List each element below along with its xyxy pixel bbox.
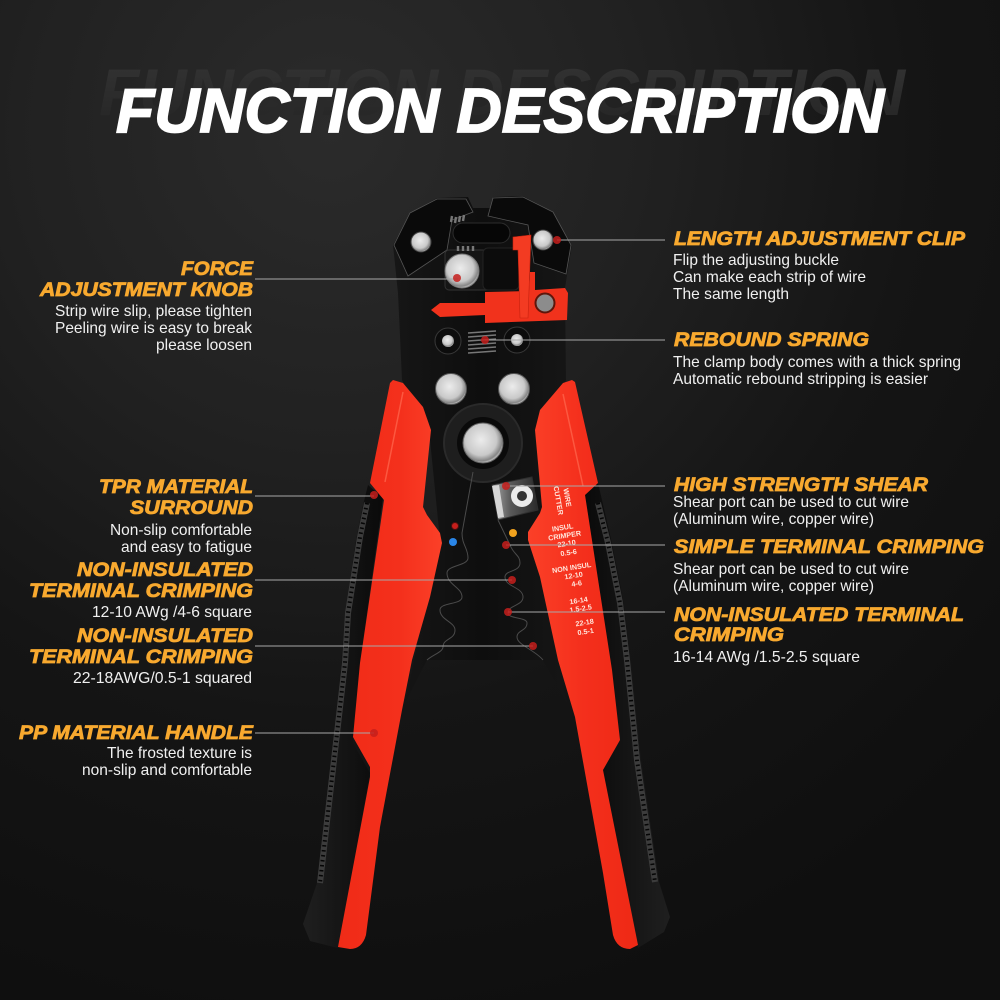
handle printed labels: WIRE [561, 488, 574, 508]
heading: LENGTH ADJUSTMENT CLIP [674, 228, 966, 250]
inner dark block [483, 248, 519, 290]
description [673, 494, 909, 528]
right handle highlight [563, 394, 583, 486]
callout: non-insulated terminal crimping 22-18 [29, 625, 253, 687]
handle printed labels [548, 485, 594, 637]
handle printed labels: 1.5-2.5 [569, 602, 592, 615]
heading: TPR MATERIAL [99, 476, 253, 498]
title shadow text: FUNCTION DESCRIPTION [99, 55, 906, 129]
handle printed labels: 0.5-1 [577, 626, 594, 637]
heading [99, 476, 253, 519]
description: The same length [673, 286, 789, 303]
description: Flip the adjusting buckle [673, 252, 839, 269]
handle printed labels: NON INSUL [551, 560, 592, 575]
heading: HIGH STRENGTH SHEAR [674, 474, 928, 496]
heading: TERMINAL CRIMPING [29, 646, 253, 668]
heading: NON-INSULATED [77, 559, 253, 581]
description: non-slip and comfortable [82, 762, 252, 779]
description: 16-14 AWg /1.5-2.5 square [673, 649, 860, 666]
callout: simple terminal crimping [673, 536, 984, 595]
description: 22-18AWG/0.5-1 squared [73, 670, 252, 687]
handle printed labels: 4-6 [571, 578, 582, 589]
illustration: wire stripper pliers [303, 196, 670, 949]
callout: rebound spring [673, 329, 961, 388]
heading [39, 258, 254, 301]
right red handle [528, 380, 638, 949]
handle printed labels: CUTTER [551, 485, 566, 516]
description [673, 252, 866, 303]
heading: SIMPLE TERMINAL CRIMPING [674, 536, 984, 558]
heading: NON-INSULATED [77, 625, 253, 647]
head slot [453, 223, 510, 243]
pivot ring [444, 404, 522, 482]
callout: length adjustment clip [673, 228, 966, 303]
description [55, 303, 253, 354]
left handle highlight [385, 392, 403, 482]
shear blade [492, 477, 538, 520]
plier central body [393, 196, 572, 703]
jaw profile right [498, 520, 543, 660]
callout: non-insulated terminal crimping 16-14 [673, 604, 964, 666]
heading: FORCE [181, 258, 254, 280]
heading: ADJUSTMENT KNOB [39, 279, 253, 301]
indicator dots [449, 522, 517, 546]
jaw top plates [394, 197, 571, 276]
handle printed labels: 16-14 [569, 595, 588, 606]
description: The frosted texture is [107, 745, 252, 762]
callout: force adjustment knob [39, 258, 254, 354]
heading [29, 559, 253, 602]
description: Can make each strip of wire [673, 269, 866, 286]
spring recess [435, 327, 530, 354]
knob teeth [451, 215, 473, 251]
description [110, 522, 252, 556]
pivot recess [457, 417, 509, 469]
heading [674, 604, 964, 646]
rivet: top left [411, 232, 431, 252]
rebound spring [468, 331, 496, 353]
callout: non-insulated terminal crimping 12-10 [29, 559, 253, 621]
description: Peeling wire is easy to break [55, 320, 253, 337]
title [99, 55, 906, 146]
callout: high strength shear [673, 474, 928, 528]
heading: PP MATERIAL HANDLE [19, 722, 254, 744]
heading: SURROUND [130, 497, 253, 519]
description: Shear port can be used to cut wire [673, 494, 909, 511]
adjustment knob [445, 254, 479, 288]
handle printed labels: 22-18 [575, 617, 594, 628]
description [673, 354, 961, 388]
description [82, 745, 252, 779]
title main text: FUNCTION DESCRIPTION [116, 77, 885, 146]
description: 12-10 AWg /4-6 square [92, 604, 252, 621]
description: please loosen [156, 337, 252, 354]
rivet: top right [533, 230, 553, 250]
heading: CRIMPING [674, 624, 784, 646]
heading [29, 625, 253, 668]
handle printed labels: 12-10 [564, 570, 583, 581]
callout: pp material handle [19, 722, 254, 779]
description: (Aluminum wire, copper wire) [673, 511, 874, 528]
small rivets [442, 334, 523, 347]
description [673, 561, 909, 595]
description: and easy to fatigue [121, 539, 252, 556]
right grip [585, 483, 670, 948]
callout markers [370, 236, 561, 737]
handle printed labels: 0.5-6 [560, 547, 577, 558]
description: The clamp body comes with a thick spring [673, 354, 961, 371]
description: (Aluminum wire, copper wire) [673, 578, 874, 595]
knob housing [445, 250, 501, 290]
left grip [303, 485, 383, 948]
description: Shear port can be used to cut wire [673, 561, 909, 578]
description: Automatic rebound stripping is easier [673, 371, 929, 388]
red length adjustment clip [431, 235, 568, 323]
left red handle [338, 380, 442, 949]
description: Strip wire slip, please tighten [55, 303, 252, 320]
pivot bolt [463, 423, 503, 463]
jaw profile left [427, 472, 473, 660]
description: Non-slip comfortable [110, 522, 252, 539]
clip screw [536, 294, 554, 312]
heading: REBOUND SPRING [674, 329, 869, 351]
handle printed labels: 22-10 [557, 538, 576, 549]
handle printed labels: CRIMPER [548, 528, 582, 543]
callout: tpr material surround [99, 476, 253, 556]
heading: TERMINAL CRIMPING [29, 580, 253, 602]
right grip ribs [598, 503, 655, 882]
handle printed labels: INSUL [551, 521, 575, 534]
left grip ribs [320, 503, 367, 883]
heading: NON-INSULATED TERMINAL [674, 604, 964, 626]
bolts [436, 374, 530, 404]
leader lines [255, 240, 665, 733]
